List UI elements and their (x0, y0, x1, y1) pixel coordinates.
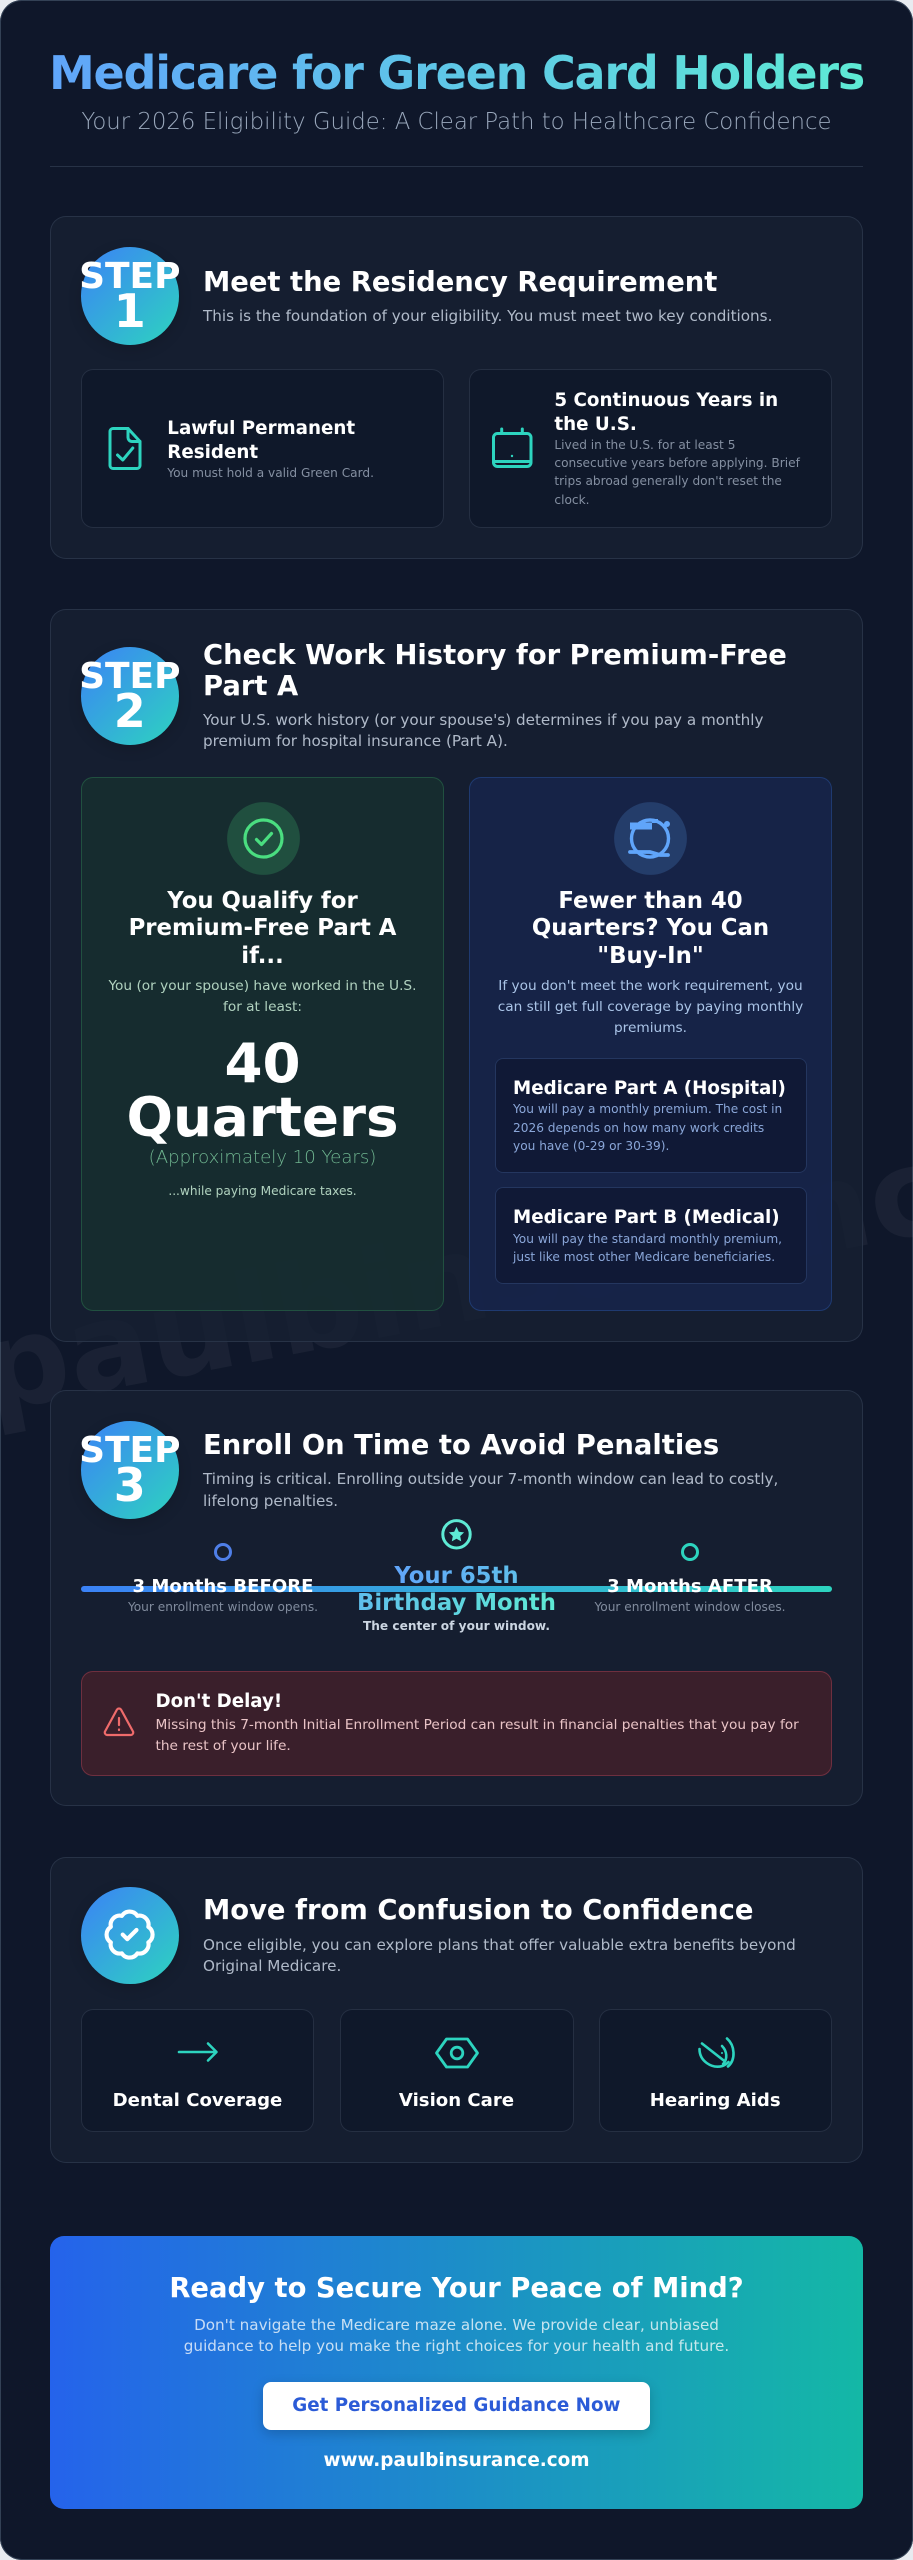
icon: refresh (614, 802, 687, 875)
icon: star marker (441, 1519, 472, 1550)
card: buy-in (469, 776, 832, 1310)
card heading: "Buy-In" (597, 943, 704, 969)
point: before (128, 1543, 318, 1614)
step 3 badge: 3 (114, 1458, 146, 1512)
card heading (532, 888, 769, 969)
icon: warning (104, 1707, 134, 1736)
cta text (184, 2316, 729, 2355)
description: Once eligible, you can explore plans that offer valuable extra benefits beyond (203, 1936, 796, 1954)
card title (554, 390, 778, 435)
big number: 40 (224, 1031, 301, 1095)
card: lawful permanent resident (81, 369, 444, 528)
box: part A (495, 1058, 807, 1173)
cta link: www.paulbinsurance.com (324, 2450, 589, 2471)
step 2 description: Your U.S. work history (or your spouse's) determines if you pay a monthly (203, 711, 763, 729)
step 3 description (202, 1470, 778, 1510)
part A text: 2026 depends on how many work credits (513, 1121, 764, 1135)
card text (554, 438, 800, 507)
label: Dental Coverage (113, 2090, 282, 2111)
card: hearing (599, 2008, 832, 2132)
birthday label: Your 65th (394, 1563, 519, 1589)
card title: 5 Continuous Years in (554, 390, 778, 410)
icon: eye hexagon (435, 2038, 479, 2068)
cta text: guidance to help you make the right choices for your health and future. (184, 2337, 729, 2355)
before marker (214, 1543, 232, 1561)
after label: 3 Months AFTER (607, 1576, 773, 1596)
card heading: if... (241, 943, 284, 969)
part B text: just like most other Medicare beneficiaries. (513, 1250, 775, 1264)
step 2 description: premium for hospital insurance (Part A). (203, 732, 508, 750)
step 3 description: Timing is critical. Enrolling outside your 7-month window can lead to costly, (203, 1470, 778, 1488)
part A title: Medicare Part A (Hospital) (513, 1078, 786, 1099)
panel: call to action (50, 2236, 863, 2509)
label: Hearing Aids (650, 2090, 781, 2111)
card: vision (340, 2008, 574, 2132)
cta button (263, 2382, 650, 2430)
card text (108, 978, 416, 1015)
box: part B (495, 1187, 807, 1284)
panel: step 1 residency (50, 216, 863, 559)
big number (126, 1031, 399, 1148)
icon: check circle (227, 802, 300, 875)
card: five continuous years (469, 369, 832, 528)
cta heading: Ready to Secure Your Peace of Mind? (169, 2273, 744, 2304)
step 3 badge: STEP (79, 1430, 181, 1471)
panel: step 3 enroll (50, 1390, 863, 1806)
approximate years: (Approximately 10 Years) (149, 1147, 376, 1168)
card text: consecutive years before applying. Brief (554, 456, 800, 470)
icon: arrow (178, 2042, 218, 2062)
subtitle: Your 2026 Eligibility Guide: A Clear Path to Healthcare Confidence (81, 108, 832, 134)
card text: You must hold a valid Green Card. (167, 466, 374, 480)
callout text (156, 1717, 799, 1754)
cta text: Don't navigate the Medicare maze alone. We provide clear, unbiased (194, 2316, 719, 2334)
card text: clock. (554, 493, 589, 507)
card text: can still get full coverage by paying monthly (498, 999, 803, 1015)
card heading: Premium-Free Part A (129, 915, 396, 941)
callout: don't delay (81, 1671, 832, 1776)
card: dental (81, 2008, 314, 2132)
card text: trips abroad generally don't reset the (554, 474, 782, 488)
description (203, 1936, 796, 1975)
after text: Your enrollment window closes. (594, 1600, 786, 1614)
label: Vision Care (399, 2090, 514, 2111)
step 3 badge (81, 1421, 179, 1519)
card title: Lawful Permanent (167, 418, 355, 438)
panel: confidence (50, 1856, 863, 2162)
card heading: Fewer than 40 (558, 888, 743, 914)
step 2 heading: Check Work History for Premium-Free (203, 640, 787, 671)
icon: badge check (104, 1910, 155, 1960)
icon: calendar (492, 428, 532, 468)
part B text (512, 1232, 782, 1264)
step 2 badge: 2 (114, 684, 146, 738)
icon: document check (108, 427, 142, 470)
card heading: You Qualify for (167, 888, 358, 914)
step 1 heading: Meet the Residency Requirement (203, 266, 717, 298)
birthday label (357, 1563, 556, 1616)
point: birthday month (357, 1519, 556, 1632)
step 2 heading (203, 640, 787, 702)
step 1 badge: STEP (79, 256, 181, 297)
step 3 description: lifelong penalties. (203, 1492, 338, 1510)
card title: Resident (167, 442, 258, 463)
card text: Lived in the U.S. for at least 5 (554, 438, 735, 452)
card text: for at least: (223, 999, 302, 1015)
heading: Move from Confusion to Confidence (203, 1895, 753, 1926)
callout text: the rest of your life. (156, 1738, 291, 1754)
card title (167, 418, 355, 463)
footnote: ...while paying Medicare taxes. (168, 1184, 357, 1198)
birthday text: The center of your window. (363, 1618, 550, 1632)
part B title: Medicare Part B (Medical) (513, 1207, 780, 1228)
after marker (681, 1543, 699, 1561)
card text: If you don't meet the work requirement, you (498, 978, 803, 994)
description: Original Medicare. (203, 1957, 341, 1975)
card text: You (or your spouse) have worked in the U.S. (109, 978, 416, 994)
step 1 description: This is the foundation of your eligibility. You must meet two key conditions. (203, 307, 772, 325)
icon: hearing (698, 2037, 735, 2068)
callout title: Don't Delay! (156, 1691, 282, 1712)
badge: verified (81, 1887, 179, 1984)
before text: Your enrollment window opens. (128, 1600, 318, 1614)
callout text: Missing this 7-month Initial Enrollment Period can result in financial penalties that you pay for (156, 1717, 799, 1733)
card text: premiums. (614, 1020, 687, 1036)
step 2 badge: STEP (79, 656, 181, 697)
card: you qualify (81, 776, 444, 1310)
part A text: you have (0-29 or 30-39). (513, 1139, 669, 1153)
big number: Quarters (126, 1084, 399, 1148)
part A text (513, 1102, 782, 1153)
step 3 heading: Enroll On Time to Avoid Penalties (203, 1430, 719, 1461)
card heading (129, 888, 396, 969)
card title: the U.S. (554, 414, 637, 435)
timeline (81, 1519, 832, 1632)
card heading: Quarters? You Can (532, 915, 769, 941)
card text (498, 978, 803, 1036)
part B text: You will pay the standard monthly premium, (513, 1232, 782, 1246)
before label: 3 Months BEFORE (132, 1576, 314, 1596)
timeline bar (81, 1586, 832, 1592)
point: after (594, 1543, 786, 1614)
part A text: You will pay a monthly premium. The cost in (513, 1102, 782, 1116)
step 2 description (203, 711, 763, 750)
birthday label: Birthday Month (357, 1590, 556, 1616)
step 1 badge (81, 247, 179, 345)
step 2 badge (81, 647, 179, 745)
step 2 heading: Part A (203, 671, 298, 702)
step 1 badge: 1 (114, 284, 146, 338)
title: Medicare for Green Card Holders (49, 46, 864, 100)
cta button: Get Personalized Guidance Now (292, 2395, 620, 2416)
panel: step 2 work history (50, 609, 863, 1342)
